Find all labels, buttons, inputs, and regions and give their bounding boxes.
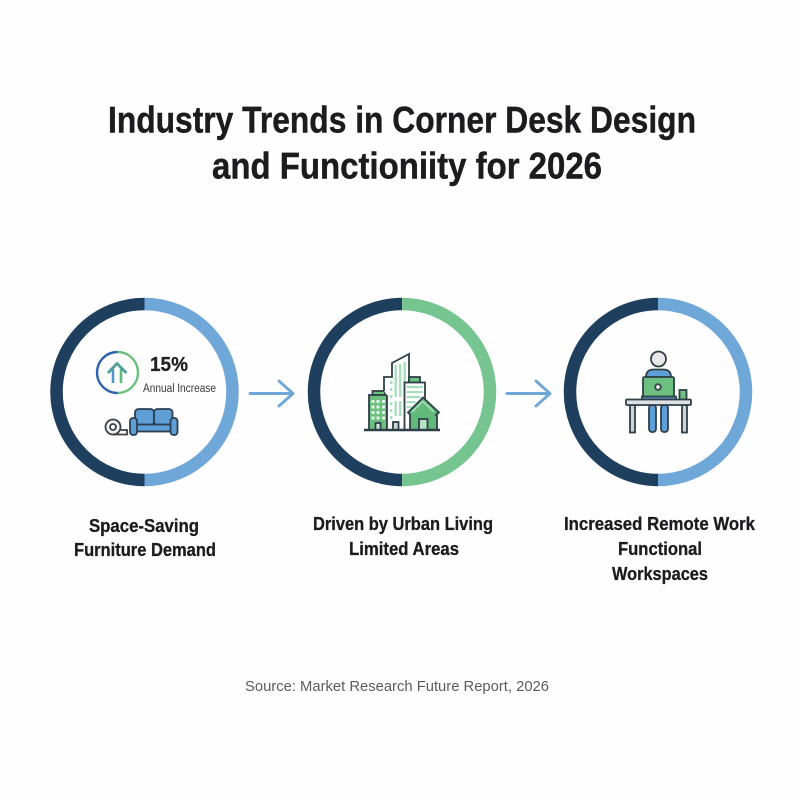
arrow: second to third xyxy=(507,381,550,406)
label: urban living: Driven by Urban Living xyxy=(313,514,493,534)
icon: sofa xyxy=(130,409,178,435)
title xyxy=(108,100,696,186)
icon: person at desk xyxy=(626,352,691,432)
icon: city buildings and house xyxy=(364,354,440,430)
label: remote work: Functional xyxy=(618,539,702,559)
label: space-saving: Space-Saving xyxy=(89,516,199,536)
label: remote work xyxy=(564,514,756,584)
arrow: first to second xyxy=(250,381,293,406)
panel: urban living xyxy=(313,304,493,559)
source note: Source: Market Research Future Report, 2026 xyxy=(245,678,549,695)
title: and Functioniity for 2026 xyxy=(212,146,602,186)
icon: growth arrows xyxy=(97,352,138,393)
ring: space-saving xyxy=(57,304,233,480)
label: space-saving xyxy=(74,516,216,560)
label: urban living xyxy=(313,514,493,559)
panel: remote work xyxy=(564,304,756,584)
label: space-saving: Furniture Demand xyxy=(74,540,216,560)
stat: 15%: 15% xyxy=(150,354,188,376)
label: urban living: Limited Areas xyxy=(349,539,459,559)
ring: remote work xyxy=(570,304,746,480)
label: remote work: Increased Remote Work xyxy=(564,514,756,534)
icon: tape roll xyxy=(106,420,127,434)
panel: space-saving furniture demand xyxy=(57,304,233,560)
ring: urban living xyxy=(314,304,490,480)
stat label: annual increase: Annual Increase xyxy=(143,383,216,395)
title: Industry Trends in Corner Desk Design xyxy=(108,100,696,140)
label: remote work: Workspaces xyxy=(612,564,708,584)
